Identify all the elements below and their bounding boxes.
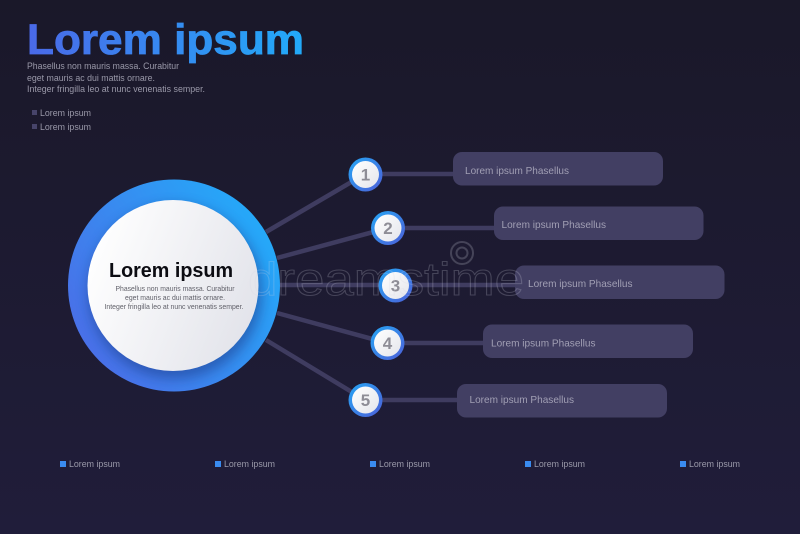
node 4: 4 xyxy=(383,334,393,353)
node 5 xyxy=(348,383,382,417)
bottom item 3: Lorem ipsum xyxy=(379,459,430,470)
box labels: Lorem ipsum Phasellus xyxy=(465,165,569,177)
watermark: dreamstime xyxy=(248,253,524,305)
intro text block xyxy=(27,61,205,95)
node 4 xyxy=(370,326,404,360)
node 2: 2 xyxy=(383,219,393,238)
bottom item 1: Lorem ipsum xyxy=(69,459,120,470)
blue ring xyxy=(68,180,280,392)
circle text: Integer fringilla leo at nunc venenatis semper. xyxy=(104,302,244,311)
node 1 xyxy=(348,158,382,192)
circle heading: Lorem ipsum xyxy=(109,260,233,282)
box 3 xyxy=(515,266,724,299)
box labels xyxy=(465,165,632,406)
ring shadow xyxy=(88,205,262,379)
legend item 2: Lorem ipsum xyxy=(40,122,91,133)
box 4 xyxy=(483,324,693,358)
intro text block: Integer fringilla leo at nunc venenatis semper. xyxy=(27,84,205,95)
node 3: 3 xyxy=(391,276,400,296)
title: Lorem ipsum xyxy=(27,16,304,64)
legend item 1: Lorem ipsum xyxy=(40,108,91,119)
box labels: Lorem ipsum Phasellus xyxy=(528,278,632,290)
connector lines xyxy=(266,174,520,400)
bottom legend xyxy=(60,459,740,470)
top legend xyxy=(32,108,91,133)
circle text: eget mauris ac dui mattis ornare. xyxy=(125,293,225,302)
bottom item 5: Lorem ipsum xyxy=(689,459,740,470)
box 5 xyxy=(457,384,667,418)
circle text xyxy=(104,284,244,311)
box 1 xyxy=(453,152,663,186)
central circle xyxy=(68,180,280,392)
label boxes xyxy=(453,152,724,418)
box labels: Lorem ipsum Phasellus xyxy=(491,338,596,350)
bottom item 2: Lorem ipsum xyxy=(224,459,275,470)
box labels: Lorem ipsum Phasellus xyxy=(470,394,574,406)
node 5: 5 xyxy=(361,391,370,410)
bottom item 4: Lorem ipsum xyxy=(534,459,585,470)
box labels: Lorem ipsum Phasellus xyxy=(502,219,606,231)
intro text block: eget mauris ac dui mattis ornare. xyxy=(27,73,155,84)
box 2 xyxy=(494,206,704,240)
intro text block: Phasellus non mauris massa. Curabitur xyxy=(27,61,179,72)
node 1: 1 xyxy=(361,166,370,184)
white disc xyxy=(88,200,258,371)
node 3 xyxy=(378,268,412,302)
node 2 xyxy=(371,211,405,245)
circle text: Phasellus non mauris massa. Curabitur xyxy=(116,284,235,293)
